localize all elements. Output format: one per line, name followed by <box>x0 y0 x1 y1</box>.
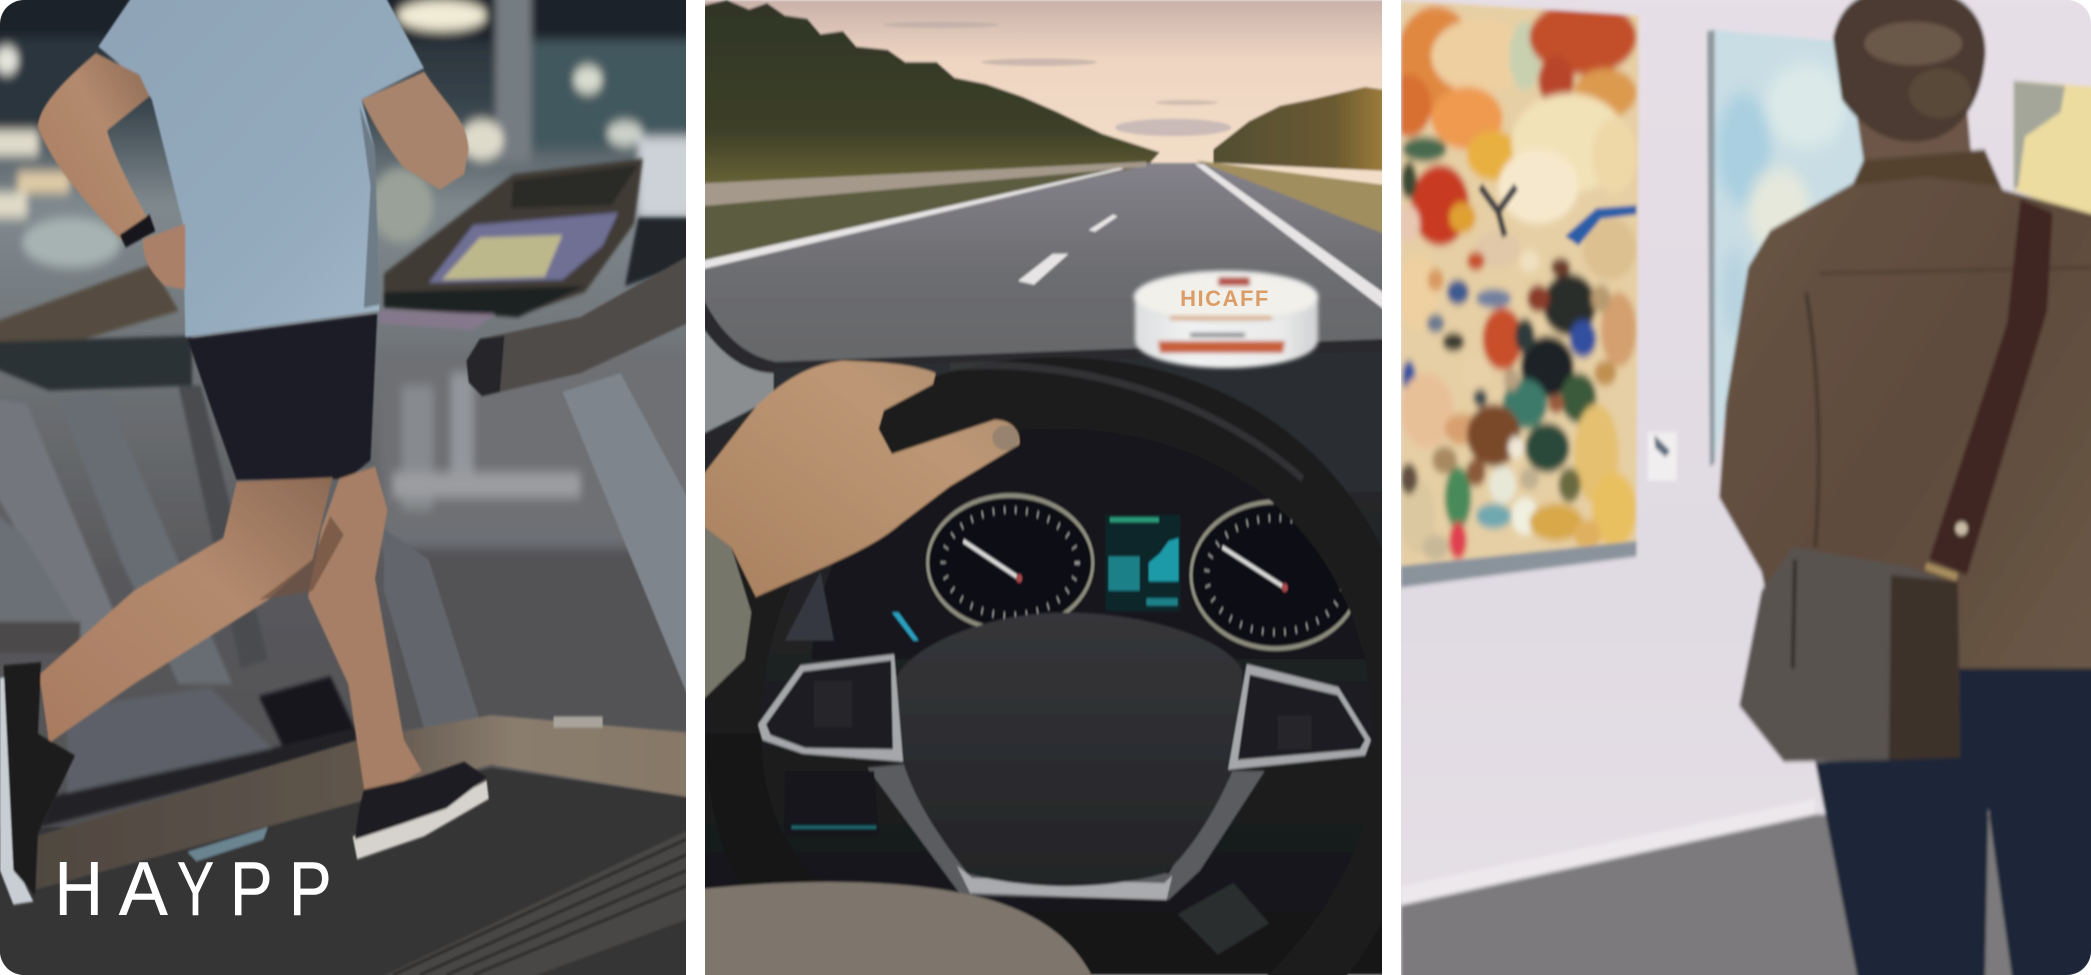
runner left arm <box>38 53 150 239</box>
HAYPP logo: Y <box>177 848 214 932</box>
steering wheel rim <box>733 365 1401 975</box>
can brand name: HICAFF <box>1180 286 1270 311</box>
visitor hair <box>1833 0 1986 142</box>
central display <box>1105 515 1180 611</box>
HAYPP logo: A <box>119 847 168 931</box>
visitor jeans <box>1815 665 2091 975</box>
HAYPP logo: H <box>55 847 103 932</box>
HAYPP logo: P <box>289 846 332 931</box>
left forest <box>700 0 1160 183</box>
left wheel controls <box>758 654 903 762</box>
runner trailing shoe <box>0 662 75 905</box>
shirt side shadow <box>359 106 379 308</box>
runner right arm <box>362 72 469 190</box>
treadmill deck and belt <box>0 715 701 975</box>
gym background <box>0 0 701 975</box>
driver thumbnail <box>992 425 1019 450</box>
road <box>705 161 1382 364</box>
right verge <box>1196 160 1387 236</box>
wall label <box>1648 432 1677 481</box>
dashboard and windscreen edge <box>700 292 1387 975</box>
bag strap <box>1925 199 2053 581</box>
treadmill console right <box>379 159 701 330</box>
visitor jacket <box>1719 149 2091 759</box>
runner wrist band <box>120 215 155 247</box>
panel: treadmill runner photo <box>0 0 701 975</box>
pale blue painting <box>1707 30 1864 466</box>
left verge and guard rail <box>700 162 1146 264</box>
gauge right <box>1191 502 1361 649</box>
jacket collar <box>1853 150 2000 187</box>
visitor neck <box>1855 106 1971 165</box>
large abstract painting <box>1387 0 1645 588</box>
panel: art gallery photo <box>1382 0 2091 975</box>
driver hand <box>700 361 1020 597</box>
snus can <box>1135 272 1318 368</box>
runner shirt <box>98 0 424 337</box>
gallery wall <box>1382 0 2091 975</box>
right wheel controls <box>1228 664 1371 770</box>
knee shadow <box>259 516 344 600</box>
runner left hand <box>143 224 185 289</box>
road markings <box>700 164 1387 312</box>
wheel hub <box>896 612 1242 886</box>
runner trailing leg <box>39 478 333 743</box>
gauge left <box>928 496 1093 630</box>
small yellow painting <box>2014 81 2091 224</box>
sunset sky <box>700 0 1387 187</box>
shoulder bag <box>1739 547 1960 762</box>
jacket seam and sleeve shadow <box>1806 267 2091 547</box>
right forest <box>1213 87 1387 171</box>
treadmill handle and post right <box>384 249 701 743</box>
HAYPP logo: P <box>230 846 273 931</box>
HAYPP logo <box>60 862 328 916</box>
driver sleeve <box>700 524 751 703</box>
runner shorts <box>187 314 377 480</box>
treadmill left rails and posts <box>0 264 357 827</box>
gallery floor <box>1401 799 2091 975</box>
runner standing leg <box>308 466 422 802</box>
driver arm foreground <box>700 882 1095 975</box>
instrument cluster <box>785 423 1370 659</box>
runner figure <box>0 0 489 905</box>
panel: driving photo <box>700 0 1401 975</box>
runner standing shoe <box>353 762 489 859</box>
wheel lower spokes <box>785 764 1269 954</box>
